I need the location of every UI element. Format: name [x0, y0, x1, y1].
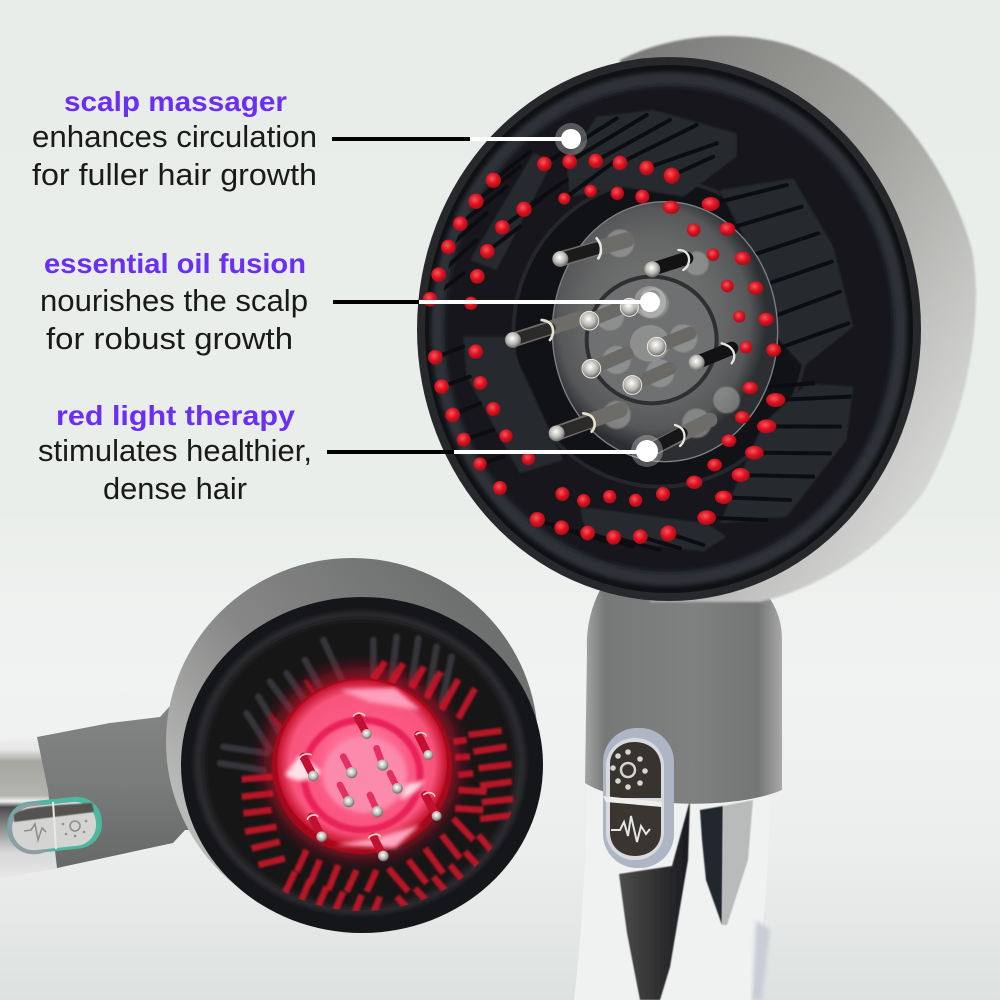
- product: small device with red light on: [0, 558, 543, 933]
- glowing center disc: [272, 678, 452, 854]
- central ring recess: [513, 180, 807, 487]
- text: enhances circulation: enhances circulation: [32, 119, 317, 154]
- text: nourishes the scalp: nourishes the scalp: [40, 283, 308, 318]
- leader line: red light therapy: [327, 435, 663, 467]
- glowing bristles: [220, 637, 513, 922]
- icon: pulse wave: [24, 824, 46, 840]
- small device head shell: [166, 558, 538, 926]
- icon: light sun: [610, 749, 648, 790]
- pin ball tips: [505, 251, 705, 441]
- device neck: [585, 588, 782, 804]
- text: dense hair: dense hair: [103, 471, 247, 506]
- brush bristle field: [430, 110, 853, 552]
- leader line: essential oil fusion: [333, 286, 666, 318]
- heading: essential oil fusion: essential oil fusion: [44, 248, 306, 279]
- device handle chrome: [574, 770, 770, 1000]
- glow halo: [264, 667, 460, 859]
- device head bezel: [417, 57, 921, 601]
- heading: scalp massager: scalp massager: [64, 86, 287, 117]
- heading: red light therapy: red light therapy: [56, 400, 295, 431]
- small device bezel: [181, 597, 543, 933]
- text: for robust growth: for robust growth: [46, 321, 293, 356]
- red LED dots: [423, 154, 785, 545]
- glowing pins: [299, 713, 442, 861]
- callout: scalp massager: [32, 86, 317, 192]
- callout: essential oil fusion: [40, 248, 308, 356]
- small device control button: [5, 794, 104, 857]
- leader line: scalp massager: [332, 123, 587, 155]
- text: stimulates healthier,: stimulates healthier,: [38, 433, 312, 468]
- icon: pulse wave: [611, 816, 650, 842]
- center disc: [552, 202, 778, 462]
- device head shell: [620, 36, 976, 602]
- small device chrome handle: [0, 736, 60, 878]
- long pins: [513, 238, 734, 448]
- product: large upright device: [417, 36, 976, 1000]
- callout: red light therapy: [38, 400, 312, 506]
- bristle stems: [430, 115, 850, 550]
- small device neck: [37, 695, 220, 868]
- text: for fuller hair growth: for fuller hair growth: [32, 157, 317, 192]
- icon: light sun: [62, 820, 87, 837]
- device control button: [603, 728, 674, 868]
